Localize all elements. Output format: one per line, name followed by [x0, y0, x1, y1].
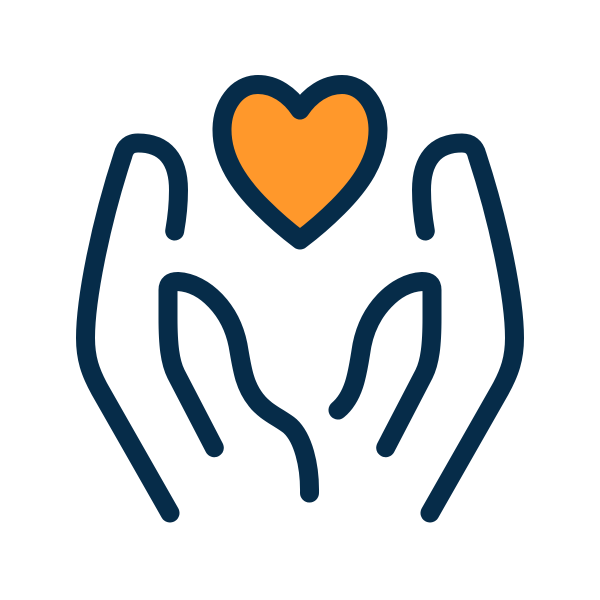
icon: heart — [222, 84, 378, 240]
icon: left outer hand — [86, 143, 178, 513]
icon: right inner hand — [338, 282, 432, 448]
icon: right outer hand — [422, 143, 514, 513]
icon: left inner hand — [168, 282, 310, 493]
